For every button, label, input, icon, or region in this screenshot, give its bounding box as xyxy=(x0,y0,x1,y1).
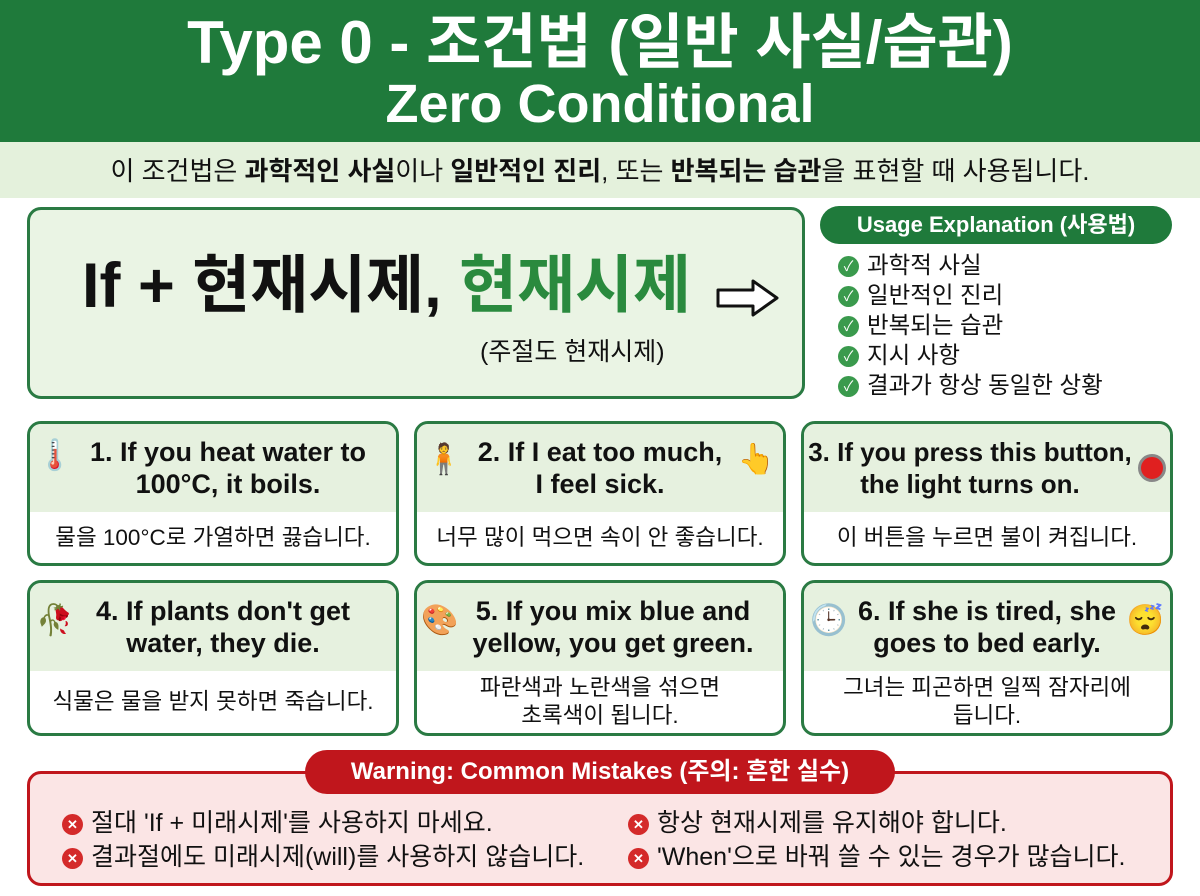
warning items left: 절대 'If + 미래시제'를 사용하지 마세요. xyxy=(91,809,493,837)
card 5: 🎨 xyxy=(421,604,458,637)
card 6 xyxy=(801,580,1173,736)
warning items left xyxy=(62,809,584,871)
card 4: 식물은 물을 받지 못하면 죽습니다. xyxy=(52,689,374,714)
arrow xyxy=(716,280,779,317)
panel: formula xyxy=(27,207,805,399)
card 6: 듭니다. xyxy=(953,703,1021,728)
card 4: 🥀 xyxy=(36,604,73,637)
warning pill xyxy=(305,750,895,794)
card 1: 100°C, it boils. xyxy=(136,469,320,499)
subtitle description: 이 조건법은 과학적인 사실이나 일반적인 진리, 또는 반복되는 습관을 표현할 때 사용됩니다. xyxy=(110,156,1090,186)
card 2 xyxy=(414,421,786,566)
card 1: 물을 100°C로 가열하면 끓습니다. xyxy=(55,524,371,550)
formula text: If + 현재시제, 현재시제 xyxy=(82,251,691,321)
header title: Zero Conditional xyxy=(386,74,814,134)
usage list: 지시 사항 xyxy=(867,342,960,368)
card 4 xyxy=(27,580,399,736)
card 3 xyxy=(801,421,1173,566)
card 6: 😴 xyxy=(1127,604,1164,637)
warning items left: 결과절에도 미래시제(will)를 사용하지 않습니다. xyxy=(91,843,584,871)
usage list: 반복되는 습관 xyxy=(867,312,1003,338)
header title: Type 0 - 조건법 (일반 사실/습관) xyxy=(187,9,1013,76)
usage list: ✓ xyxy=(844,288,853,304)
usage list: ✓ xyxy=(844,318,853,334)
card 3: 3. If you press this button, xyxy=(808,437,1132,467)
card 3: 이 버튼을 누르면 불이 켜집니다. xyxy=(837,524,1137,550)
warning items right: 항상 현재시제를 유지해야 합니다. xyxy=(657,809,1007,837)
card 5: 5. If you mix blue and xyxy=(476,596,750,626)
card 5: yellow, you get green. xyxy=(472,628,754,658)
usage pill xyxy=(820,206,1172,244)
usage list xyxy=(838,252,1103,398)
warning items right: ✕ xyxy=(633,817,644,832)
card 6: 그녀는 피곤하면 일찍 잠자리에 xyxy=(843,675,1131,700)
card 2: I feel sick. xyxy=(535,469,665,499)
card 2: 👆 xyxy=(738,443,775,476)
card 3: the light turns on. xyxy=(860,469,1080,499)
card 6: 🕒 xyxy=(810,604,847,637)
card 1: 1. If you heat water to xyxy=(90,437,366,467)
card 2: 2. If I eat too much, xyxy=(478,437,722,467)
card 2: 🧍 xyxy=(425,443,462,476)
card 6: 6. If she is tired, she xyxy=(858,596,1116,626)
card 5: 파란색과 노란색을 섞으면 xyxy=(480,675,720,700)
subtitle description xyxy=(0,142,1200,198)
usage pill: Usage Explanation (사용법) xyxy=(857,212,1135,237)
usage list: 과학적 사실 xyxy=(867,252,982,278)
warning items left: ✕ xyxy=(67,851,78,866)
usage list: 결과가 항상 동일한 상황 xyxy=(867,372,1103,398)
warning items right: 'When'으로 바꿔 쓸 수 있는 경우가 많습니다. xyxy=(657,843,1125,871)
header title xyxy=(0,0,1200,142)
usage list: ✓ xyxy=(844,378,853,394)
card 4: water, they die. xyxy=(126,628,320,658)
warning items right: ✕ xyxy=(633,851,644,866)
usage list: ✓ xyxy=(844,258,853,274)
card 5 xyxy=(414,580,786,736)
card 5: 초록색이 됩니다. xyxy=(521,703,679,728)
warning pill: Warning: Common Mistakes (주의: 흔한 실수) xyxy=(351,758,849,785)
usage list: 일반적인 진리 xyxy=(867,282,1003,308)
card 4: 4. If plants don't get xyxy=(96,596,350,626)
card 1: 🌡️ xyxy=(36,439,73,472)
usage list: ✓ xyxy=(844,348,853,364)
formula note: (주절도 현재시제) xyxy=(480,338,665,366)
panel: warning xyxy=(27,771,1173,886)
card 2: 너무 많이 먹으면 속이 안 좋습니다. xyxy=(436,524,764,550)
card 1 xyxy=(27,421,399,566)
card 6: goes to bed early. xyxy=(873,628,1101,658)
warning items right xyxy=(628,809,1125,871)
warning items left: ✕ xyxy=(67,817,78,832)
